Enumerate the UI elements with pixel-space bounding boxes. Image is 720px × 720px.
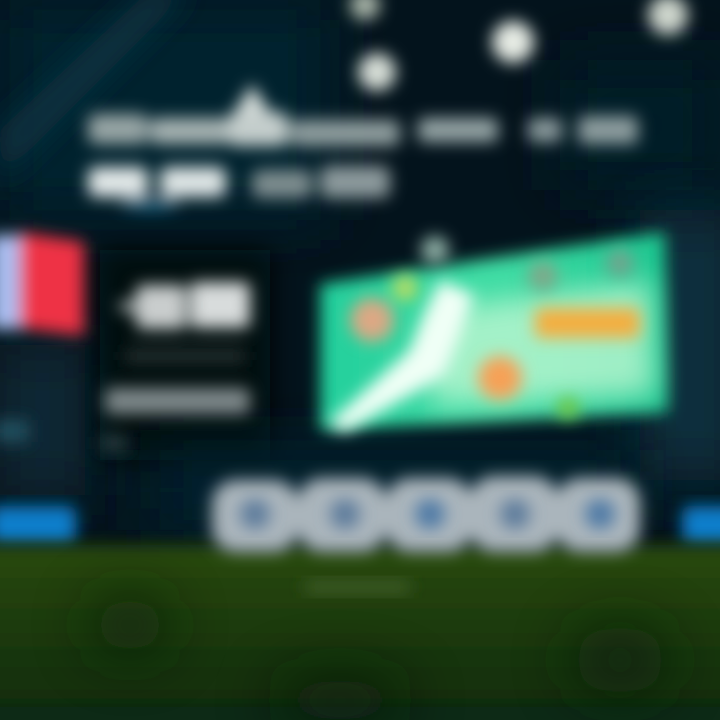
caption under icons bbox=[305, 580, 410, 594]
grass field bbox=[0, 545, 720, 720]
glowing light dots bbox=[350, 0, 688, 91]
bright diagonal line bbox=[328, 280, 474, 432]
row of five round icons bbox=[212, 476, 640, 552]
right blue button bbox=[682, 506, 720, 544]
left blue button bbox=[0, 506, 76, 544]
flag card on the left bbox=[0, 232, 84, 336]
title bbox=[88, 84, 638, 210]
icon centres bbox=[240, 499, 615, 529]
pink and yellow marker bbox=[350, 275, 418, 342]
pale chart area bbox=[430, 280, 655, 405]
middle text block bbox=[0, 282, 250, 450]
orange bars bbox=[421, 236, 640, 419]
green chart panel bbox=[320, 232, 668, 432]
